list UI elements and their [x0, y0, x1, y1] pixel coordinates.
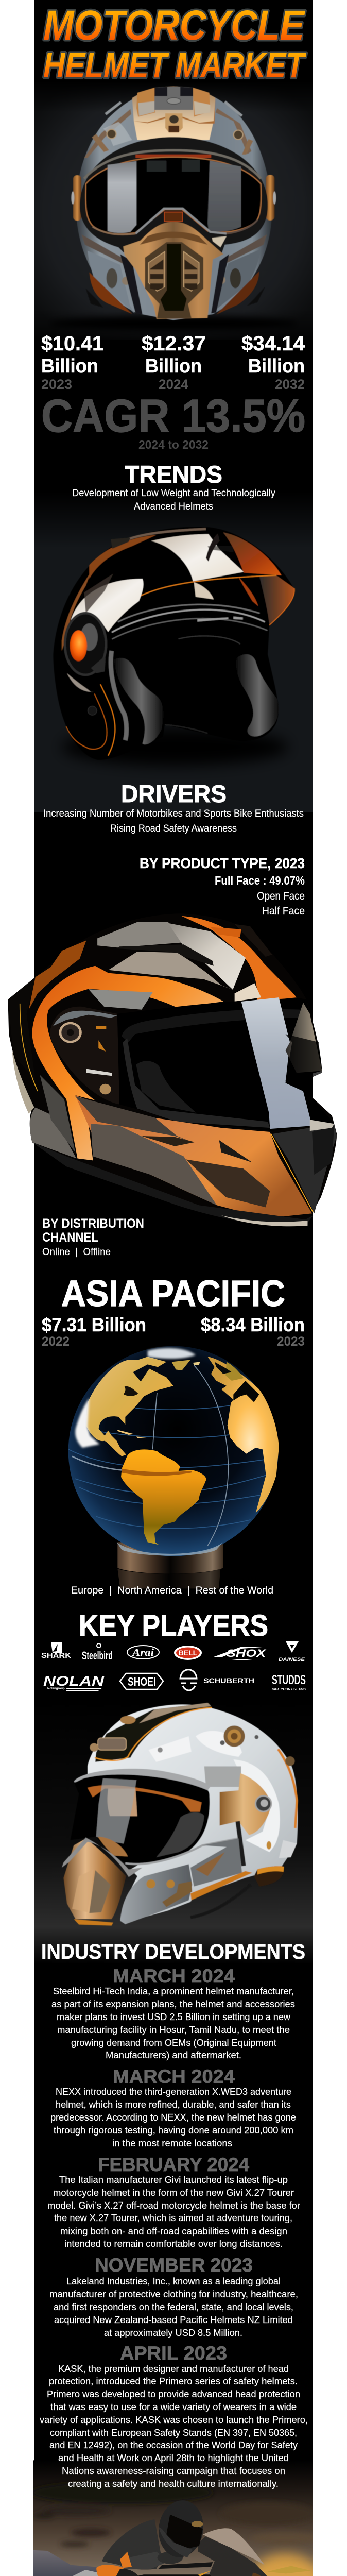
product type segment list: Half Face: [262, 905, 305, 917]
development: April 2023, KASK: Nations awareness-raising campaign that focuses on: [62, 2466, 285, 2476]
logo: Studds: RIDE YOUR DREAMS: [272, 1687, 306, 1691]
development: March 2024, Steelbird: growing demand from OEMs (Original Equipment: [71, 2038, 276, 2048]
product type segment list: Open Face: [257, 890, 305, 902]
development: February 2024, Givi: FEBRUARY 2024: [98, 2154, 249, 2175]
logo: Bell: [174, 1646, 202, 1660]
logo: Arai: [127, 1646, 159, 1659]
regional heading and figures: 2023: [277, 1334, 305, 1349]
development: March 2024, Steelbird: Manufacturers) and aftermarket.: [106, 2050, 241, 2060]
regional heading and figures: 2022: [42, 1334, 70, 1349]
development: March 2024, Steelbird: maker plans to invest USD 2.5 Billion in setting up a new: [57, 2012, 291, 2022]
trends heading and text: Advanced Helmets: [134, 501, 213, 512]
drivers heading and text: [43, 780, 304, 834]
industry developments heading: INDUSTRY DEVELOPMENTS: [41, 1940, 305, 1963]
development: April 2023, KASK: variety of applications. KASK was chosen to launch the Primero,: [40, 2415, 308, 2425]
development: March 2024, NEXX: [50, 2066, 296, 2148]
development: February 2024, Givi: motorcycle helmet in the form of the new Givi X.27 Tourer: [53, 2188, 294, 2198]
development: March 2024, Steelbird: Steelbird Hi-Tech India, a prominent helmet manufacturer,: [53, 1986, 294, 1996]
title: MOTORCYCLE: [43, 2, 305, 49]
development: April 2023, KASK: [40, 2343, 308, 2489]
stat: 2023: $10.41: [41, 332, 103, 355]
development: November 2023, Lakeland: acquired New Zealand-based Pacific Helmets NZ Limited: [54, 2315, 293, 2325]
logo: Nolan: [43, 1673, 105, 1691]
logo: Steelbird: Steelbird: [82, 1649, 113, 1662]
logo: Shark: SHARK: [41, 1651, 71, 1660]
drivers heading and text: DRIVERS: [121, 780, 227, 807]
stat: 2024: 2024: [159, 377, 188, 392]
development: March 2024, NEXX: helmet, which is more refined, durable, and safer than its: [56, 2099, 291, 2110]
distribution channel text: BY DISTRIBUTION: [42, 1216, 144, 1231]
drivers heading and text: Increasing Number of Motorbikes and Sports Bike Enthusiasts: [43, 808, 304, 819]
development: February 2024, Givi: [47, 2154, 300, 2249]
logo: Nolan: NOLAN: [43, 1673, 105, 1689]
regional heading and figures: ASIA PACIFIC: [61, 1274, 285, 1314]
development: March 2024, NEXX: through rigorous testing, having done around 200,000 km: [54, 2125, 293, 2136]
panel: white helmet backdrop: [34, 1699, 313, 1964]
development: November 2023, Lakeland: and first responders on the federal, state, and local levels,: [54, 2302, 293, 2312]
product type segment list: BY PRODUCT TYPE, 2023: [140, 855, 305, 871]
regional heading and figures: $7.31 Billion: [42, 1314, 146, 1335]
development: March 2024, NEXX: MARCH 2024: [113, 2066, 235, 2087]
development: November 2023, Lakeland: at approximately USD 8.5 Million.: [104, 2328, 242, 2338]
distribution channel text: CHANNEL: [42, 1230, 98, 1245]
product type segment list: [140, 855, 305, 917]
logo: Nolan: Nolangroup: [47, 1687, 65, 1690]
illustration: glass globe on a bronze stand: [68, 1346, 279, 1588]
development: March 2024, NEXX: predecessor. According to NEXX, the new helmet has gone: [50, 2112, 296, 2123]
stat: 2024: [142, 332, 206, 392]
logo: Shoei: SHOEI: [128, 1675, 156, 1688]
stat: 2024: $12.37: [142, 332, 206, 355]
development: March 2024, Steelbird: manufacturing facility in Hosur, Tamil Nadu, to meet the: [57, 2025, 290, 2035]
stat: 2023: 2023: [41, 377, 72, 392]
title: [43, 2, 306, 85]
product type segment list: Full Face : 49.07%: [215, 874, 305, 887]
development: April 2023, KASK: that was easy to use for a wide variety of wearers in a wide: [50, 2402, 297, 2412]
illustration: white helmet with bronze mask: [62, 1703, 298, 1926]
regional heading and figures: $8.34 Billion: [201, 1314, 305, 1335]
logo: Shox: SHOX: [227, 1648, 267, 1659]
illustration: orange full-face helmet overflowing the column: [8, 913, 337, 1226]
development: April 2023, KASK: compliant with European Safety Stands (EN 397, EN 50365,: [50, 2428, 297, 2438]
panel: front helmet backdrop: [34, 81, 313, 340]
stat: 2023: Billion: [41, 355, 98, 377]
logo: Dainese: [279, 1641, 305, 1662]
logo: Schuberth: SCHUBERTH: [203, 1676, 254, 1685]
development: April 2023, KASK: and EN 12492), on the occasion of the World Day for Safety: [49, 2440, 298, 2450]
stat: 2032: [241, 332, 305, 392]
development: November 2023, Lakeland: Lakeland Industries, Inc., known as a leading global: [66, 2276, 281, 2286]
trends heading and text: TRENDS: [125, 461, 222, 488]
distribution channel text: Online | Offline: [42, 1247, 111, 1258]
CAGR callout: 2024 to 2032: [138, 438, 209, 451]
market size figures: [41, 332, 305, 392]
logo: Shark: [41, 1642, 71, 1660]
development: November 2023, Lakeland: manufacturer of protective clothing for industry, healthcare,: [49, 2289, 298, 2299]
development: April 2023, KASK: APRIL 2023: [120, 2343, 227, 2364]
other regions list: Europe | North America | Rest of the World: [71, 1585, 273, 1596]
panel: open-face helmet backdrop: [34, 492, 313, 812]
logo: Studds: STUDDS: [272, 1673, 306, 1687]
stat: 2032: 2032: [275, 377, 305, 392]
stat: 2024: Billion: [145, 355, 202, 377]
development: March 2024, NEXX: in the most remote locations: [112, 2138, 232, 2148]
development: April 2023, KASK: Primero was developed to provide advanced head protection: [47, 2389, 300, 2399]
logo: Arai: Arai: [131, 1646, 154, 1658]
logo: Bell: BELL: [179, 1649, 197, 1657]
development: February 2024, Givi: mixing both on- and off-road capabilities with a design: [60, 2226, 287, 2236]
development: February 2024, Givi: the new X.27 Tourer, which is aimed at adventure touring,: [54, 2213, 292, 2223]
trends heading and text: [72, 461, 275, 512]
development: April 2023, KASK: and Health at Work on April 28th to highlight the United: [58, 2453, 289, 2463]
drivers heading and text: Rising Road Safety Awareness: [110, 823, 237, 834]
logo: Steelbird: [82, 1643, 113, 1662]
logo: Shox: [214, 1647, 269, 1660]
development: March 2024, NEXX: NEXX introduced the third-generation X.WED3 adventure: [56, 2087, 291, 2097]
development: February 2024, Givi: The Italian manufacturer Givi launched its latest flip-up: [59, 2175, 288, 2185]
logo: Schuberth: [180, 1670, 254, 1690]
stat: 2032: Billion: [248, 355, 305, 377]
key player logos: [41, 1641, 306, 1691]
logo: Shoei: [120, 1673, 163, 1689]
trends heading and text: Development of Low Weight and Technologically: [72, 488, 275, 499]
development: March 2024, Steelbird: as part of its expansion plans, the helmet and accessories: [51, 1999, 295, 2009]
development: March 2024, Steelbird: [51, 1965, 295, 2060]
development: April 2023, KASK: creating a safety and health culture internationally.: [68, 2479, 279, 2489]
regional heading and figures: [42, 1274, 305, 1349]
development: February 2024, Givi: model. Givi’s X.27 off-road motorcycle helmet is the base for: [47, 2200, 300, 2211]
development: November 2023, Lakeland: [49, 2255, 298, 2338]
key players heading: KEY PLAYERS: [79, 1609, 268, 1642]
development: March 2024, Steelbird: MARCH 2024: [113, 1965, 235, 1987]
development: April 2023, KASK: protection, introduced the Primero series of safety helmets.: [49, 2376, 298, 2386]
development: February 2024, Givi: intended to remain comfortable over long distances.: [64, 2239, 283, 2249]
logo: Studds: [272, 1673, 306, 1691]
illustration: glossy black open-face helmet: [53, 527, 294, 760]
title: HELMET MARKET: [43, 45, 306, 85]
development: November 2023, Lakeland: NOVEMBER 2023: [95, 2255, 253, 2276]
distribution channel text: [42, 1216, 144, 1258]
stat: 2023: [41, 332, 103, 392]
logo: Dainese: DAINESE: [279, 1657, 305, 1662]
CAGR callout: CAGR 13.5%: [41, 391, 305, 442]
development: April 2023, KASK: KASK, the premium designer and manufacturer of head: [58, 2364, 289, 2374]
illustration: rider on a sport motorcycle at sunset: [31, 2460, 325, 2576]
illustration: front-view helmet with bronze mask: [71, 86, 276, 320]
stat: 2032: $34.14: [241, 332, 305, 355]
